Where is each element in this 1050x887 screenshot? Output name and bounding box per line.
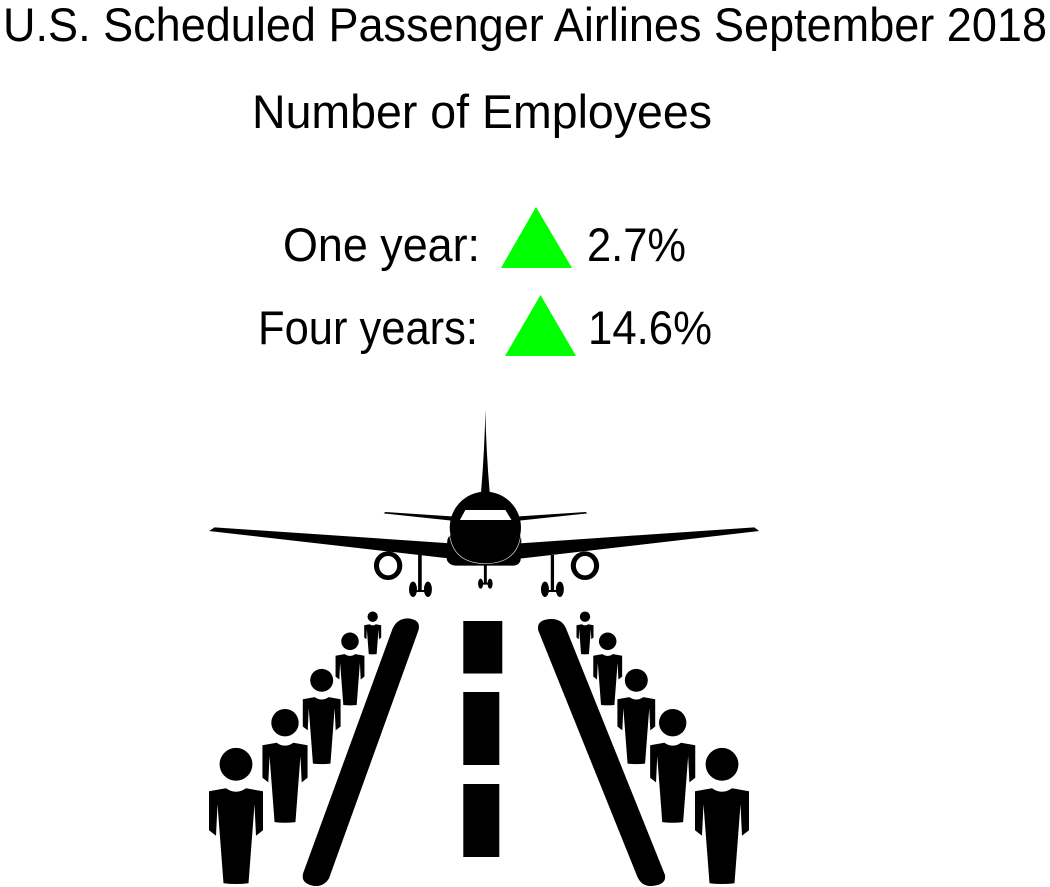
tail fin xyxy=(481,410,490,493)
people left line xyxy=(209,612,381,884)
horizontal stabilizers xyxy=(384,512,587,521)
fuselage belly xyxy=(447,535,521,566)
fuselage outline xyxy=(449,533,521,564)
stat: one year xyxy=(283,207,686,271)
windshield xyxy=(460,510,512,520)
right landing gear xyxy=(547,555,557,592)
left landing gear xyxy=(415,555,425,592)
engines xyxy=(376,554,400,578)
stat: four years xyxy=(258,295,712,356)
label: one year: One year: xyxy=(283,218,480,271)
runway right edge xyxy=(538,619,665,886)
fuselage xyxy=(450,492,521,564)
icon: green up triangle, one year xyxy=(501,207,572,268)
wings xyxy=(209,527,759,559)
subtitle: Number of Employees xyxy=(252,85,712,138)
runway left edge xyxy=(303,618,419,886)
value: one year change: 2.7% xyxy=(587,218,686,271)
runway centre dashes xyxy=(463,621,502,857)
label: four years: Four years: xyxy=(258,301,478,354)
value: four year change: 14.6% xyxy=(588,301,712,354)
icon: airplane front view xyxy=(209,410,759,597)
people right line xyxy=(576,612,749,884)
icon: green up triangle, four years xyxy=(505,295,576,356)
nose gear xyxy=(482,565,489,585)
